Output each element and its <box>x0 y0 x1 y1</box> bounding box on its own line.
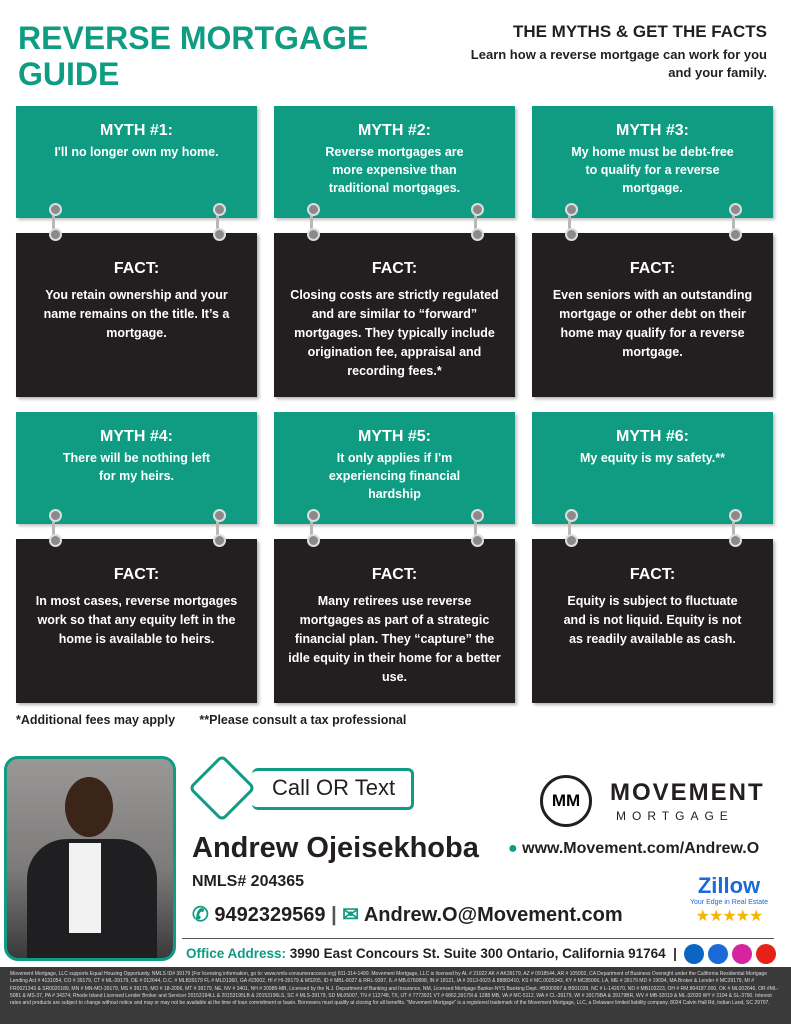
movement logo: MM <box>552 791 580 810</box>
myth 1: I'll no longer own my home. <box>54 145 219 159</box>
fact 5: FACT: <box>372 566 417 583</box>
subtitle: Learn how a reverse mortgage can work for you <box>471 47 767 62</box>
social icons <box>684 944 776 964</box>
fact 4: In most cases, reverse mortgages work so that any equity left in the home is available to heirs. <box>36 594 237 646</box>
zillow: ★★★★★ <box>696 908 762 925</box>
myth 1: MYTH #1: <box>100 122 173 139</box>
photo <box>4 756 176 961</box>
name: Andrew Ojeisekhoba <box>192 832 479 864</box>
myth 4 <box>16 412 257 524</box>
myth 3: MYTH #3: <box>616 122 689 139</box>
myth 4: MYTH #4: <box>100 428 173 445</box>
title <box>18 20 368 92</box>
myth 3 <box>532 106 773 218</box>
zillow: Your Edge in Real Estate <box>690 899 768 906</box>
fact 5: Many retirees use reverse mortgages as part of a strategic financial plan. They “capture” the idle equity in their home for a better use. <box>288 594 501 684</box>
fact 2 <box>274 233 515 397</box>
fact 3 <box>532 233 773 397</box>
office address: Office Address: 3990 East Concours St. Suite 300 Ontario, California 91764 | <box>186 946 677 961</box>
subtitle <box>471 22 767 80</box>
fact 6 <box>532 539 773 703</box>
rings <box>49 203 742 547</box>
myth 2: Reverse mortgages are more expensive than traditional mortgages. <box>325 145 464 195</box>
myth 1 <box>16 106 257 218</box>
fact 1: FACT: <box>114 260 159 277</box>
zillow: Zillow <box>698 873 760 898</box>
nmls: NMLS# 204365 <box>192 873 304 890</box>
fact 4: FACT: <box>114 566 159 583</box>
title: REVERSE MORTGAGE <box>18 20 368 56</box>
subtitle: THE MYTHS & GET THE FACTS <box>513 22 767 41</box>
fact 6: FACT: <box>630 566 675 583</box>
footnotes: *Additional fees may apply **Please consult a tax professional <box>16 713 406 727</box>
fact 2: Closing costs are strictly regulated and are similar to “forward” mortgages. They typically include origination fee, appraisal and recording fees.* <box>290 288 499 378</box>
fact 1: You retain ownership and your name remains on the title. It’s a mortgage. <box>44 288 229 340</box>
call or text badge: Call OR Text <box>272 775 395 800</box>
movement logo: MOVEMENT <box>610 779 765 806</box>
myth 4: There will be nothing left for my heirs. <box>63 451 210 483</box>
legal disclaimer <box>0 967 791 1024</box>
fact 4 <box>16 539 257 703</box>
title: GUIDE <box>18 56 119 92</box>
zillow <box>690 873 768 925</box>
myth 5 <box>274 412 515 524</box>
myth 2 <box>274 106 515 218</box>
legal disclaimer: Movement Mortgage, LLC supports Equal Housing Opportunity. NMLS ID# 39179 (For licensing information, go to: www.nmls-consumeraccess.org) 811-314-1499. Movement Mortgage, LLC is licensed by AL # 21022 AK # AK39179, AZ # 0918544, AR # 105002, CA Department of Business Oversight under the California Residential Mortgage Lending Act # 4131054, CO # 39179, CT # ML-39179, DE # 012644, D.C. # MLB39179 FL # MLD1360, GA #23002, HI # HI-39179 & MS205, ID # MBL-8027 & RRL-9397, IL # MB.6760898, IN # 18121, IA # 2013-0023 & 88883410, KS # MC.0025343, KY # MC85066, LA, ME # 39179 MD # 19094, MA Broker & Lender # MC39179, MI # FR0021343 & SR0020189, MN # MN-MO-39179, MS # 39179, MO # 18-2056, MT # 39179, NE, NV # 3401, NH # 20985-MB, Licensed by the N.J. Department of Banking and Insurance, NM, Licensed Mortgage Banker-NYS Banking Dept. #B500997 & B501039, NC # L-142670, ND # MB103223, OH # RM.804187.000, OK # ML002646, OR #ML-5081 & MS-37, PA # 34374, Rhode Island Licensed Lender Broker and Servicer 20153194LL & 20153195LB & 20153196LS, SC # MLS-39179, SD ML05007, TN # 112748, TX, UT # 7773921 VT # 6862,39179l & 1288 MB, VA # MC-5112, WA # CL-39179, WI # 39179BA & 39179BR, WV # MB-32019 & ML-32020 WY # 3104 & SL-3790. Interest rates and products are subject to change without notice and may or may not be available at the time of loan commitment or basin. Borrowers must qualify at closing for all benefits. "Movement Mortgage" is a registered trademark of the Movement Mortgage, LLC, a Delaware limited liability company. 8024 Calvin Hall Rd, Indian Land, SC 29707. <box>10 971 778 1006</box>
movement logo <box>540 775 765 827</box>
myth 5: MYTH #5: <box>358 428 431 445</box>
movement logo: MORTGAGE <box>616 809 734 823</box>
subtitle: and your family. <box>668 65 767 80</box>
myth 6: MYTH #6: <box>616 428 689 445</box>
fact 3: FACT: <box>630 260 675 277</box>
myth 6: My equity is my safety.** <box>580 451 725 465</box>
website: ● www.Movement.com/Andrew.O <box>508 840 759 857</box>
fact 6: Equity is subject to fluctuate and is not liquid. Equity is not as readily available as cash. <box>564 594 741 646</box>
myth 2: MYTH #2: <box>358 122 431 139</box>
fact 5 <box>274 539 515 703</box>
myth 5: It only applies if I'm experiencing financial hardship <box>329 451 460 501</box>
call or text badge <box>190 756 414 820</box>
fact 2: FACT: <box>372 260 417 277</box>
myth 6 <box>532 412 773 524</box>
fact 1 <box>16 233 257 397</box>
phone and email: ✆ 9492329569 | ✉ Andrew.O@Movement.com <box>192 904 623 926</box>
fact 3: Even seniors with an outstanding mortgage or other debt on their home may qualify for a reverse mortgage. <box>553 288 752 359</box>
myth 3: My home must be debt-free to qualify for a reverse mortgage. <box>571 145 734 195</box>
